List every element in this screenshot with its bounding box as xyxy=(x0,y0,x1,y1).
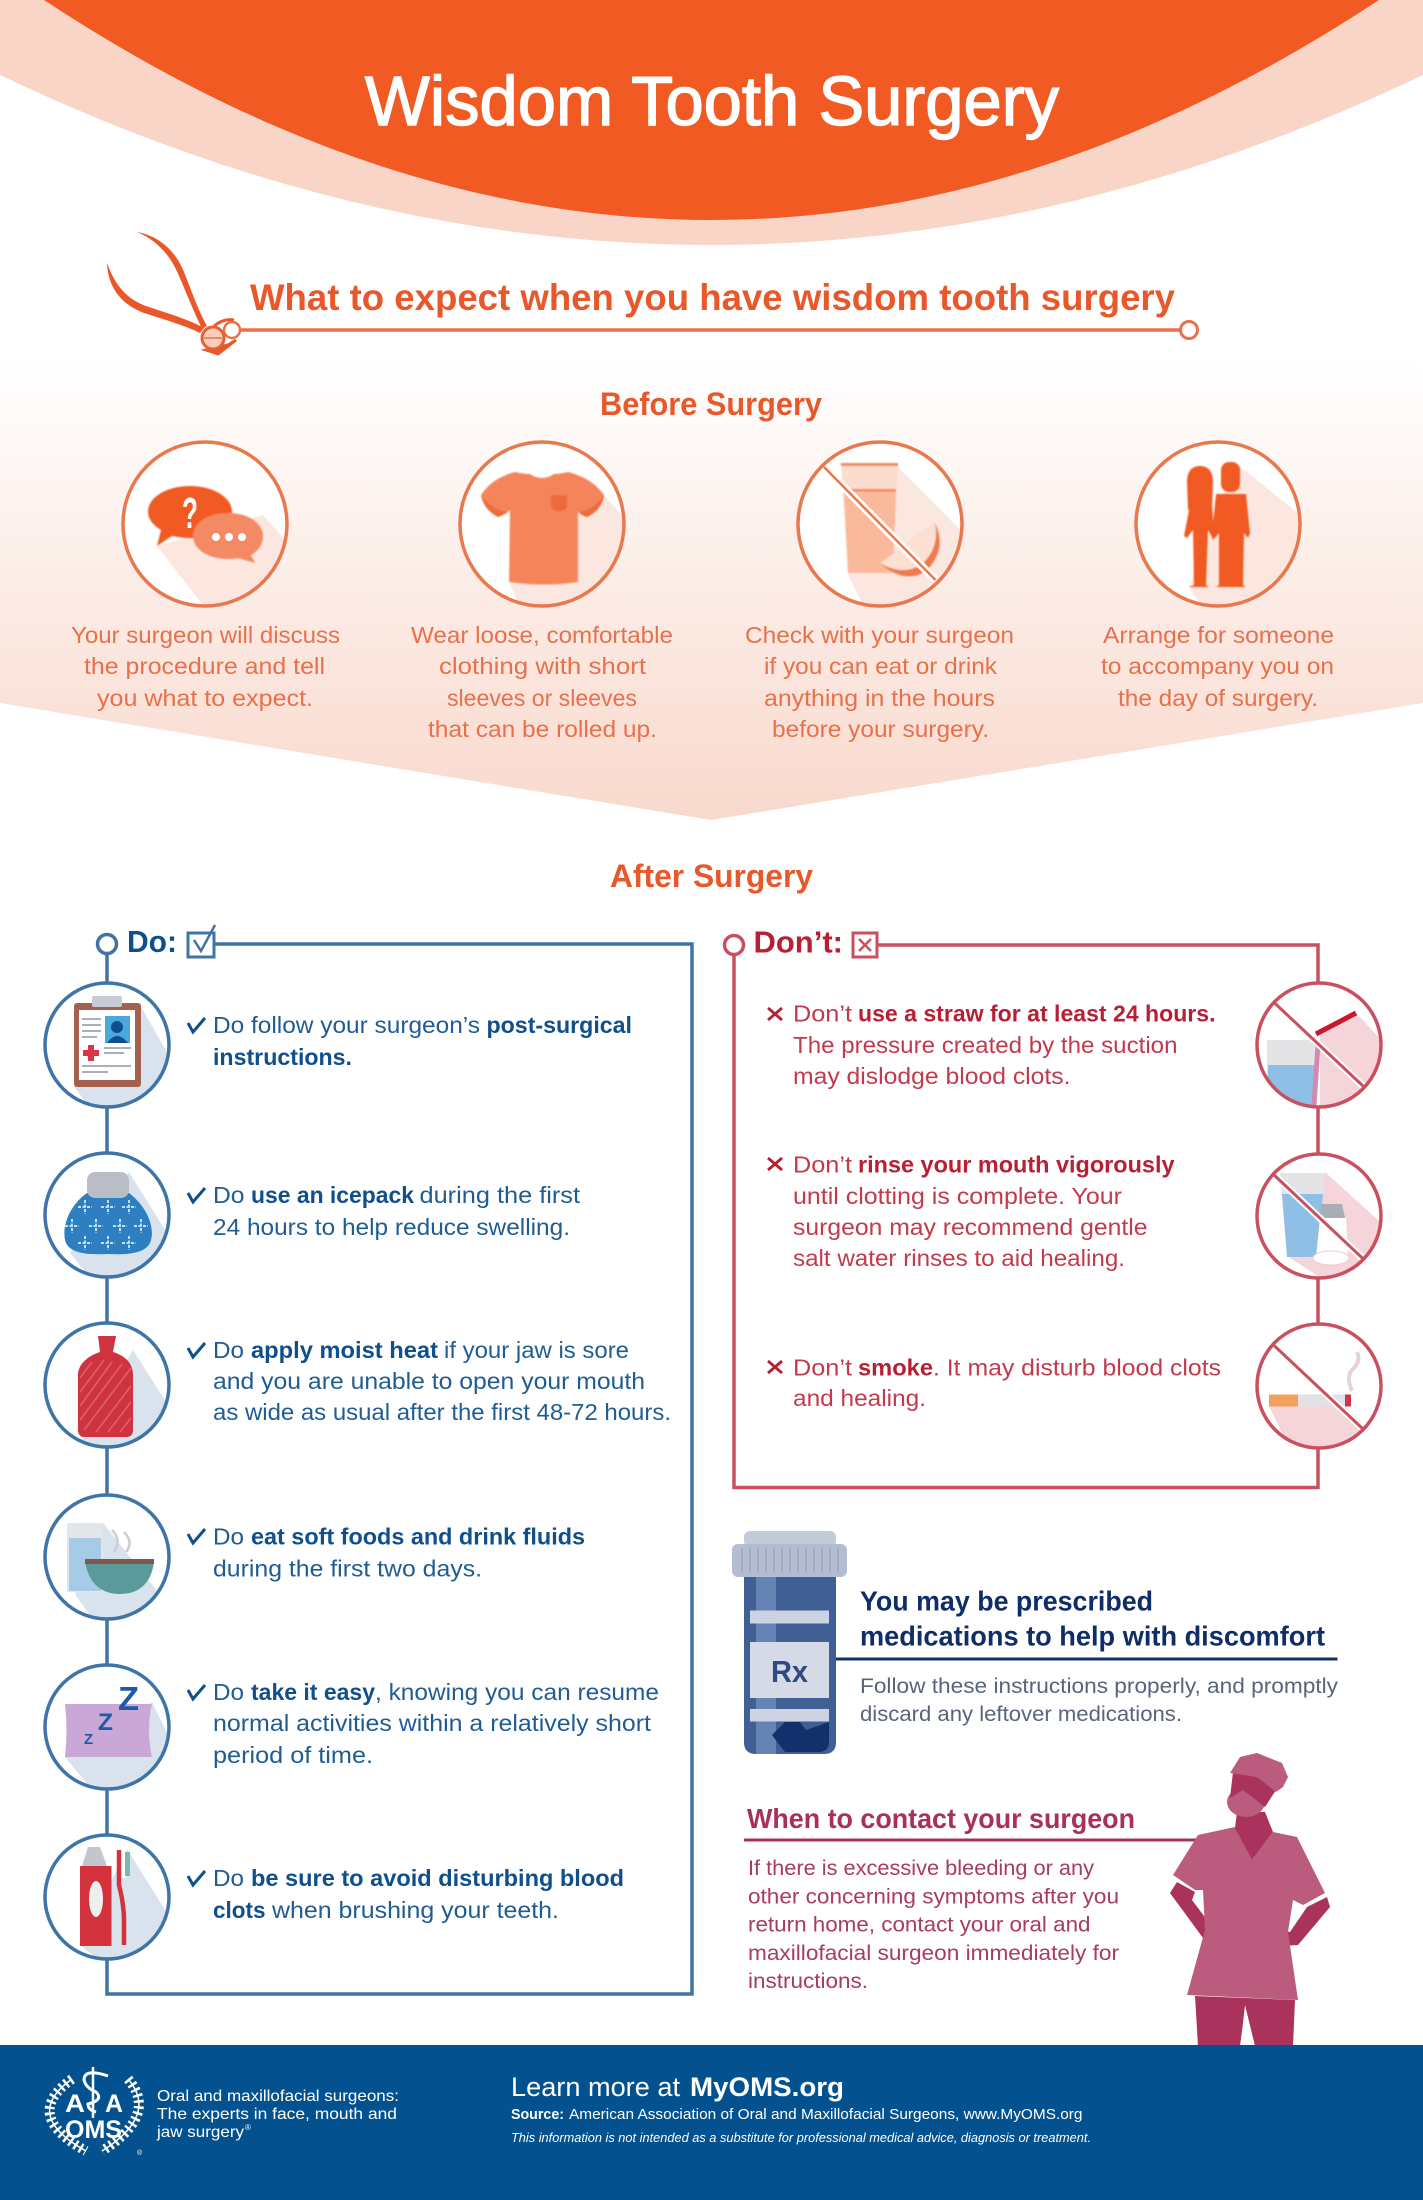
icon: no rinse xyxy=(1255,1152,1383,1280)
contact text: If there is excessive bleeding or any xyxy=(748,1856,1094,1880)
text: rinse your mouth vigorously xyxy=(858,1152,1174,1178)
caption: before your surgery. xyxy=(772,716,989,742)
logo: AAOMS wreath xyxy=(50,2067,143,2157)
contact text: maxillofacial surgeon immediately for xyxy=(748,1941,1119,1965)
icon: forceps xyxy=(107,232,240,354)
icon: hot water bottle xyxy=(43,1321,171,1449)
icon: no straw xyxy=(1255,981,1383,1109)
icon: t-shirt xyxy=(458,440,626,608)
text: Do xyxy=(213,1865,244,1891)
caption: that can be rolled up. xyxy=(428,716,657,742)
text: Do xyxy=(213,1182,244,1208)
step: discuss procedure xyxy=(71,442,340,711)
step: loose clothing xyxy=(411,442,673,742)
contact heading: When to contact your surgeon xyxy=(747,1803,1135,1834)
text: apply moist heat xyxy=(251,1337,438,1363)
tagline: The experts in face, mouth and xyxy=(157,2106,397,2123)
text: clots xyxy=(213,1897,266,1923)
icon: toothpaste and brush xyxy=(43,1833,171,1961)
text: Do xyxy=(213,1524,244,1550)
contact text: return home, contact your oral and xyxy=(748,1912,1090,1936)
dont item: rinse xyxy=(768,1152,1400,1290)
text: Do xyxy=(213,1679,244,1705)
text: Don’t xyxy=(793,1000,852,1026)
step: arrange companion xyxy=(1101,442,1334,711)
tagline: ® xyxy=(245,2123,251,2132)
do heading: Do: xyxy=(127,924,177,959)
tick xyxy=(188,1018,205,1032)
text: eat soft foods and drink fluids xyxy=(251,1524,585,1550)
text xyxy=(213,1524,585,1582)
caption: Wear loose, comfortable xyxy=(411,622,673,648)
text: Do follow your surgeon’s xyxy=(213,1012,480,1038)
text: if your jaw is sore xyxy=(444,1337,629,1363)
panel: dont xyxy=(724,924,1410,1488)
medications text xyxy=(860,1674,1338,1726)
text: 24 hours to help reduce swelling. xyxy=(213,1214,570,1240)
caption: sleeves or sleeves xyxy=(447,685,637,711)
text: when brushing your teeth. xyxy=(271,1897,559,1923)
icon: pillow and z xyxy=(43,1663,171,1791)
icon: speech bubbles: ? xyxy=(182,489,198,538)
dont item: smoke xyxy=(767,1322,1383,1450)
header banner xyxy=(0,0,1423,245)
icon: surgeon figure xyxy=(1170,1753,1330,2046)
icon: clipboard xyxy=(43,981,171,1109)
medications text: Follow these instructions properly, and promptly xyxy=(860,1674,1338,1698)
title: Wisdom Tooth Surgery xyxy=(365,62,1059,140)
text: during the first xyxy=(420,1182,581,1208)
icon: x box xyxy=(853,933,877,957)
icon: speech bubbles xyxy=(121,440,289,608)
caption xyxy=(1101,622,1334,711)
medications heading: You may be prescribed xyxy=(860,1586,1153,1616)
do item: moist heat xyxy=(43,1321,669,1449)
text: be sure to avoid disturbing blood xyxy=(251,1865,624,1891)
text xyxy=(213,1337,671,1425)
text: and healing. xyxy=(793,1385,926,1411)
caption: if you can eat or drink xyxy=(764,653,997,679)
tick xyxy=(188,1529,205,1543)
caption xyxy=(411,622,673,742)
dont heading: Don’t: xyxy=(754,924,843,960)
icon: pillow and z: Z xyxy=(84,1731,93,1748)
do item: take it easy xyxy=(45,1665,659,1800)
icon: pillow and z: Z xyxy=(118,1680,139,1717)
caption: Arrange for someone xyxy=(1103,622,1334,648)
text: The pressure created by the suction xyxy=(793,1032,1178,1058)
text xyxy=(793,1000,1216,1089)
tagline xyxy=(156,2088,399,2141)
dont frame xyxy=(734,945,1318,1488)
text: , knowing you can resume xyxy=(375,1679,659,1705)
panel: before surgery xyxy=(0,360,1423,820)
text: period of time. xyxy=(213,1742,373,1768)
source: American Association of Oral and Maxillofacial Surgeons, www.MyOMS.org xyxy=(569,2106,1082,2123)
icon: no glass and fruit xyxy=(796,440,964,608)
logo: AAOMS wreath: A xyxy=(105,2090,123,2118)
caption: clothing with short xyxy=(439,653,647,679)
text: instructions. xyxy=(213,1044,352,1070)
text xyxy=(213,1679,659,1768)
text: surgeon may recommend gentle xyxy=(793,1214,1148,1240)
text xyxy=(793,1152,1174,1271)
contact text xyxy=(748,1856,1119,1993)
text: salt water rinses to aid healing. xyxy=(793,1245,1125,1271)
text: . It may disturb blood clots xyxy=(933,1354,1221,1380)
caption: the day of surgery. xyxy=(1118,685,1318,711)
logo: AAOMS wreath: ® xyxy=(137,2149,143,2157)
step: eating and drinking xyxy=(745,442,1014,742)
text xyxy=(213,1865,624,1923)
x mark xyxy=(768,1158,782,1170)
tick xyxy=(188,1871,205,1885)
text: Do xyxy=(213,1337,244,1363)
logo: AAOMS wreath: OMS xyxy=(65,2116,122,2144)
after surgery heading: After Surgery xyxy=(610,858,813,894)
section heading with forceps xyxy=(107,232,1198,354)
text: smoke xyxy=(858,1354,933,1380)
do item: brushing xyxy=(45,1835,624,1970)
text: and you are unable to open your mouth xyxy=(213,1368,645,1394)
source: Source: xyxy=(511,2106,564,2123)
text: use an icepack xyxy=(251,1182,415,1208)
text: Don’t xyxy=(793,1152,852,1178)
text: as wide as usual after the first 48-72 hours. xyxy=(213,1399,671,1425)
caption: the procedure and tell xyxy=(84,653,325,679)
heading text: What to expect when you have wisdom tooth surgery xyxy=(250,277,1175,318)
caption: to accompany you on xyxy=(1101,653,1334,679)
icon: no smoking xyxy=(1255,1322,1383,1450)
panel: medications xyxy=(732,1531,1338,1754)
icon: pill bottle xyxy=(732,1531,847,1754)
contact text: other concerning symptoms after you xyxy=(748,1884,1119,1908)
text: use a straw for at least 24 hours. xyxy=(858,1000,1216,1026)
text: post-surgical xyxy=(486,1012,632,1038)
text xyxy=(793,1354,1221,1411)
disclaimer: This information is not intended as a substitute for professional medical advice, diagnosis or treatment. xyxy=(511,2131,1091,2145)
text: normal activities within a relatively short xyxy=(213,1710,651,1736)
medications heading: medications to help with discomfort xyxy=(860,1620,1325,1652)
do item: instructions xyxy=(45,983,632,1120)
caption: anything in the hours xyxy=(764,685,995,711)
before surgery heading: Before Surgery xyxy=(600,386,822,422)
panel: do xyxy=(45,924,692,1994)
tagline: jaw surgery xyxy=(156,2124,244,2141)
text: take it easy xyxy=(251,1679,375,1705)
icon: checkbox xyxy=(188,925,215,957)
do frame xyxy=(107,944,692,1994)
rx label: Rx xyxy=(771,1654,809,1689)
contact text: instructions. xyxy=(748,1969,868,1993)
medications heading xyxy=(836,1586,1338,1659)
text: Don’t xyxy=(793,1354,852,1380)
panel: footer xyxy=(0,2045,1423,2200)
icon: icepack xyxy=(43,1151,171,1279)
text xyxy=(213,1182,581,1240)
text: until clotting is complete. Your xyxy=(793,1183,1122,1209)
x mark xyxy=(768,1008,782,1020)
caption: Check with your surgeon xyxy=(745,622,1014,648)
tick xyxy=(188,1685,205,1699)
tagline: Oral and maxillofacial surgeons: xyxy=(157,2088,399,2105)
caption xyxy=(71,622,340,711)
text: may dislodge blood clots. xyxy=(793,1063,1070,1089)
icon: water and bowl xyxy=(43,1493,171,1621)
icon: pillow and z: Z xyxy=(98,1709,113,1736)
medications text: discard any leftover medications. xyxy=(860,1702,1182,1726)
caption xyxy=(745,622,1014,742)
do item: icepack xyxy=(45,1153,581,1290)
tick xyxy=(188,1343,205,1357)
x mark xyxy=(768,1361,782,1373)
learn more: Learn more at xyxy=(511,2072,680,2102)
icon: two people xyxy=(1136,442,1310,610)
caption: Your surgeon will discuss xyxy=(71,622,340,648)
learn more: MyOMS.org xyxy=(690,2072,844,2102)
caption: you what to expect. xyxy=(97,685,313,711)
do item: soft foods xyxy=(45,1495,585,1630)
text xyxy=(213,1012,632,1070)
dont item: straw xyxy=(768,983,1400,1120)
panel: contact surgeon xyxy=(744,1753,1330,2046)
logo: AAOMS wreath: A xyxy=(65,2090,85,2118)
tick xyxy=(188,1188,205,1202)
text: during the first two days. xyxy=(213,1556,482,1582)
